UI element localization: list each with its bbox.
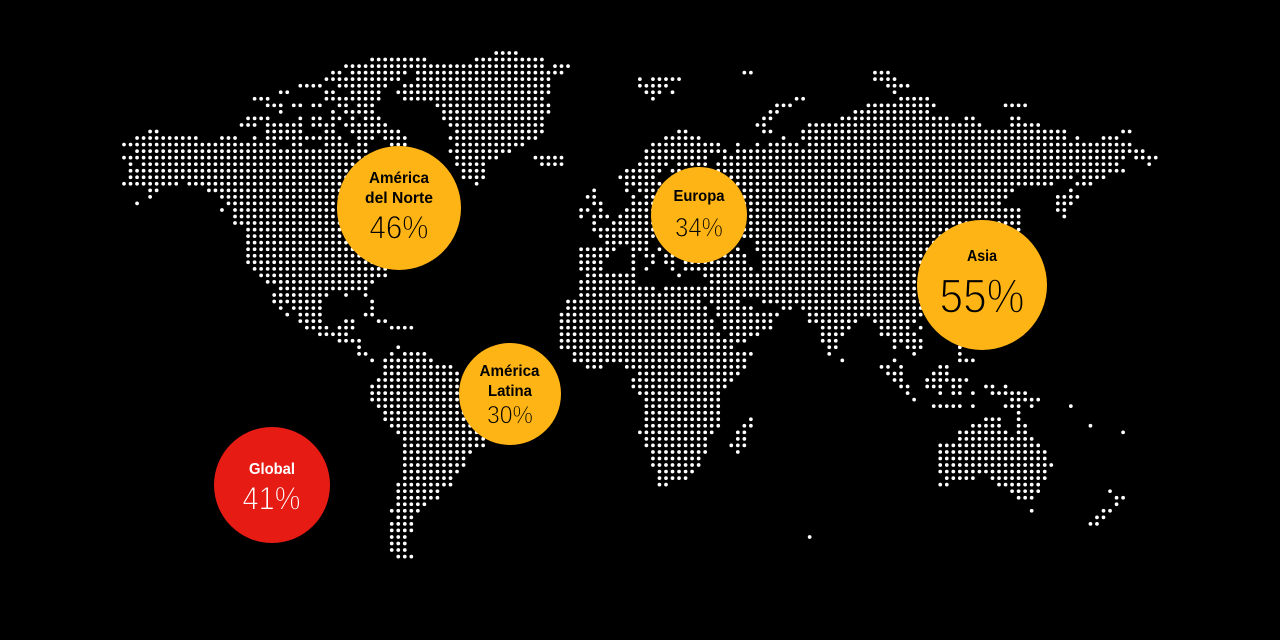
bubble: América Latina xyxy=(459,343,561,445)
bubble: América del Norte: América xyxy=(369,170,429,187)
landmass: Eurasia and Africa xyxy=(562,73,1156,537)
dot world map xyxy=(124,53,1156,557)
bubble: América Latina: 30% xyxy=(487,402,533,430)
bubble: Global: 41% xyxy=(242,480,300,516)
bubble: América del Norte: del Norte xyxy=(365,190,433,207)
landmass: North America and Greenland xyxy=(124,53,569,360)
landmass: South America xyxy=(372,347,484,557)
bubble: América del Norte xyxy=(337,146,461,270)
bubble: Asia: Asia xyxy=(967,248,997,265)
bubble: América Latina: Latina xyxy=(488,383,532,400)
bubble: Global: Global xyxy=(249,461,295,478)
bubble: Europa: Europa xyxy=(674,188,725,205)
landmass: Australia and New Zealand xyxy=(940,426,1124,524)
bubble: Europa xyxy=(651,167,747,263)
bubble: América Latina: América xyxy=(480,363,540,380)
bubble: Global xyxy=(214,427,330,543)
bubble: América del Norte: 46% xyxy=(370,210,428,246)
bubble: Europa: 34% xyxy=(675,212,723,242)
bubble: Asia xyxy=(917,220,1047,350)
bubble: Asia: 55% xyxy=(940,270,1024,324)
